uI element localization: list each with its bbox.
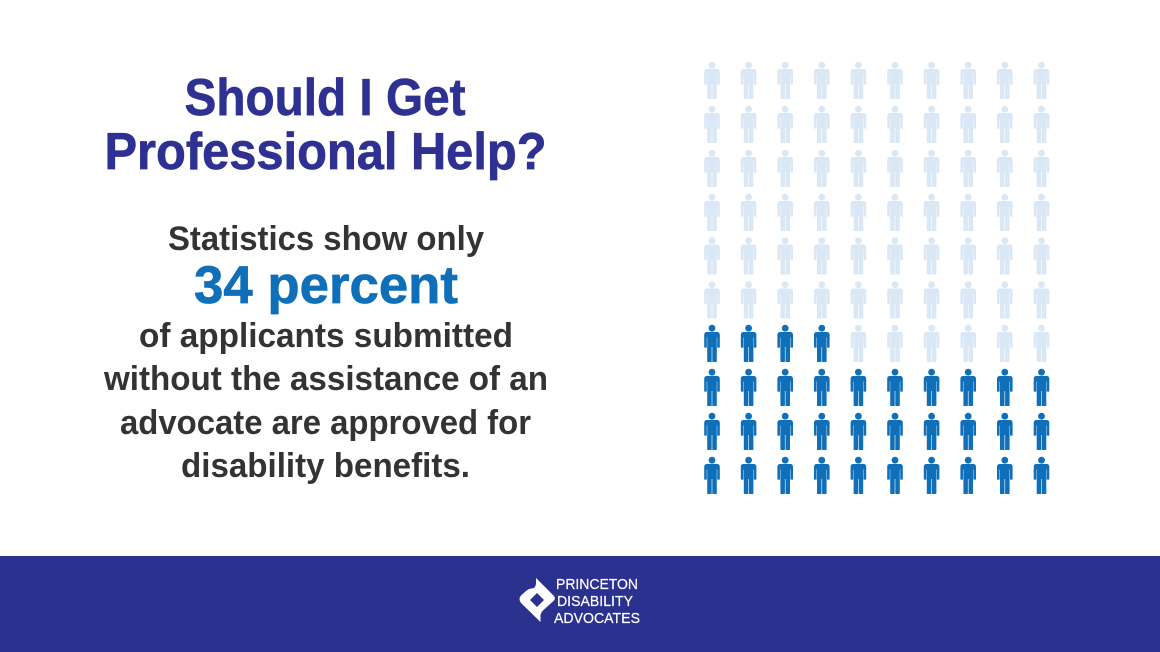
highlighted figure: 34 percent <box>194 256 458 315</box>
text block: statistic: advocate are approved for <box>120 404 531 442</box>
text block: statistic <box>103 220 548 485</box>
icon: logo mark <box>520 578 555 622</box>
logo wordmark: ADVOCATES <box>554 611 640 627</box>
pictogram: 100 people, 34 highlighted <box>704 62 1049 494</box>
text block: statistic: of applicants submitted <box>139 317 513 355</box>
logo <box>520 577 640 627</box>
logo wordmark: DISABILITY <box>557 594 633 610</box>
footer band <box>0 556 1160 652</box>
logo wordmark <box>554 577 640 627</box>
text block: statistic: without the assistance of an <box>103 360 548 398</box>
title <box>104 69 546 181</box>
dark people: 34 approved <box>704 325 1049 494</box>
text block: statistic: Statistics show only <box>168 220 484 258</box>
text block: statistic: disability benefits. <box>181 447 470 485</box>
title: Should I Get <box>184 69 466 127</box>
light people: 66 not approved <box>704 62 1049 362</box>
logo wordmark: PRINCETON <box>556 577 638 593</box>
title: Professional Help? <box>104 123 546 181</box>
